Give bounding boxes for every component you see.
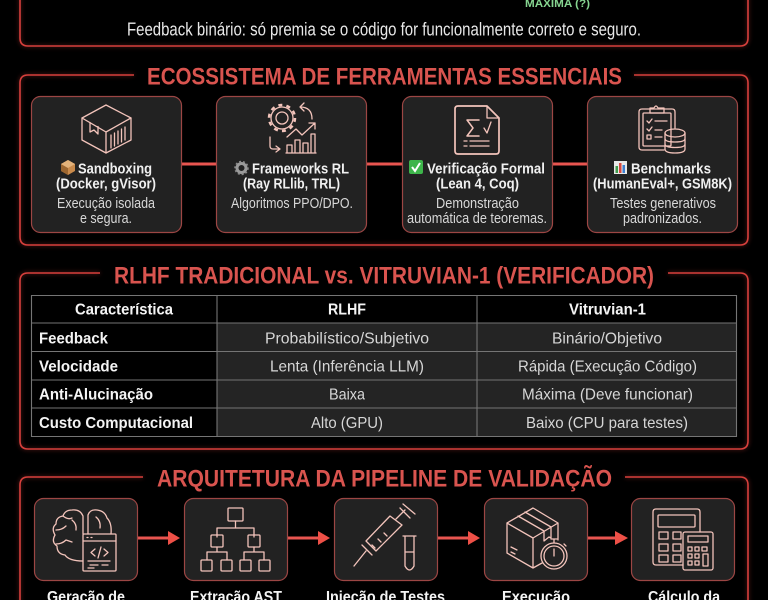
card: verificação formal (402, 96, 552, 232)
panel: ecossistema de ferramentas (20, 64, 748, 245)
row: feedback: Binário/Objetivo (552, 330, 662, 348)
icon: calculators (653, 509, 713, 570)
row: velocidade: Velocidade (39, 358, 118, 376)
step: cálculo (632, 498, 734, 600)
icon: syringe and test tube (354, 504, 416, 570)
row: velocidade: Lenta (Inferência LLM) (270, 358, 424, 376)
row: custo computacional: Alto (GPU) (311, 415, 383, 432)
icon: bar chart emoji (614, 161, 627, 174)
table header row: RLHF (328, 302, 366, 318)
card description: Demonstração (436, 196, 519, 212)
card: benchmarks: padronizados. (623, 211, 702, 227)
table header row (75, 302, 646, 318)
icon: check emoji (409, 160, 423, 174)
icon: clipboard and database (639, 106, 685, 153)
card title: Sandboxing (78, 160, 152, 178)
step: injeção de testes (326, 498, 445, 600)
card title: Benchmarks (631, 160, 711, 178)
panel: top feedback (cropped) (20, 0, 748, 46)
comparison table (32, 296, 737, 436)
card: benchmarks (588, 96, 738, 232)
heading: arquitetura: ARQUITETURA DA PIPELINE DE VALIDAÇÃO (157, 464, 612, 492)
row: feedback (39, 330, 662, 348)
heading: ecossistema: ECOSSISTEMA DE FERRAMENTAS ESSENCIAIS (147, 64, 622, 90)
heading: comparação: RLHF TRADICIONAL vs. VITRUVIAN-1 (VERIFICADOR) (114, 262, 654, 290)
row: custo computacional: Custo Computacional (39, 415, 193, 432)
card: verificação formal: (Lean 4, Coq) (436, 176, 519, 192)
panel: arquitetura da pipeline (20, 464, 748, 600)
table header row: Vitruvian-1 (569, 302, 646, 318)
row: custo computacional (39, 415, 688, 432)
arrow: step 1 to 2 (137, 531, 180, 545)
icon: gear and chart (269, 103, 316, 153)
card title: Frameworks RL (252, 160, 349, 178)
icon: syntax tree (201, 508, 270, 571)
card description: Testes generativos (610, 196, 716, 212)
card: sandboxing: e segura. (80, 211, 132, 227)
icon: container box (82, 105, 131, 153)
feedback sentence: Feedback binário: só premia se o código for funcionalmente correto e seguro. (127, 20, 641, 40)
panel: comparação RLHF vs Vitruvian (20, 262, 748, 449)
icon: gear emoji (235, 162, 248, 174)
row: anti-alucinação: Anti-Alucinação (39, 386, 153, 404)
card: sandboxing: (Docker, gVisor) (56, 176, 156, 192)
card: sandboxing (32, 96, 182, 232)
table header row: Característica (75, 302, 173, 318)
card description: Algoritmos PPO/DPO. (231, 196, 353, 212)
row: anti-alucinação: Máxima (Deve funcionar) (522, 386, 693, 404)
icon: formal document (455, 106, 499, 154)
card: verificação formal: automática de teoremas. (407, 211, 547, 227)
row: feedback: Probabilístico/Subjetivo (265, 330, 429, 348)
icon: brain with code window (53, 510, 116, 571)
icon: box with stopwatch (507, 508, 567, 569)
step: execução (484, 498, 588, 600)
arrow: step 3 to 4 (437, 531, 480, 545)
card: benchmarks: (HumanEval+, GSM8K) (593, 176, 732, 192)
arrow: step 4 to 5 (587, 531, 628, 545)
card: frameworks RL (216, 96, 366, 232)
row: feedback: Feedback (39, 330, 108, 348)
row: custo computacional: Baixo (CPU para testes) (526, 415, 688, 432)
card description: Execução isolada (57, 196, 156, 212)
step: geração (34, 498, 138, 600)
row: anti-alucinação (39, 386, 693, 404)
row: velocidade (39, 358, 697, 376)
card: frameworks RL: (Ray RLlib, TRL) (243, 176, 340, 192)
step: extração AST (184, 498, 288, 600)
arrow: step 2 to 3 (287, 531, 330, 545)
icon: package emoji (61, 160, 75, 175)
row: anti-alucinação: Baixa (329, 386, 365, 404)
connectors between cards (182, 161, 587, 167)
card title: Verificação Formal (427, 160, 545, 178)
row: velocidade: Rápida (Execução Código) (518, 358, 697, 376)
